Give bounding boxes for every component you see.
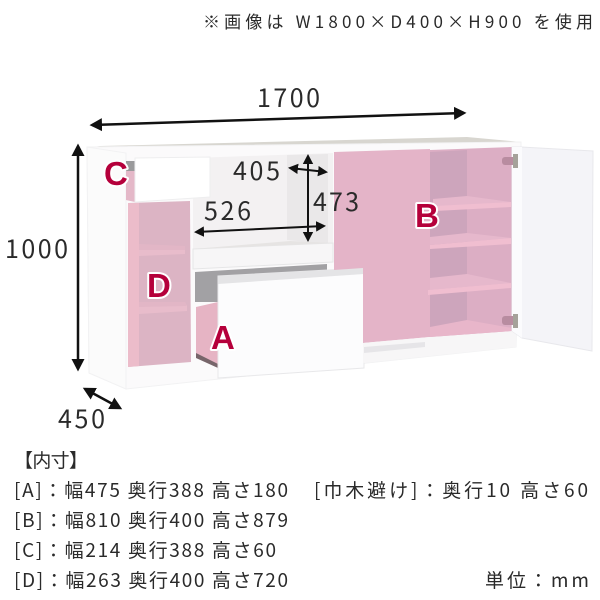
arrow: depth 450: [85, 389, 120, 408]
middle drawer strip: [193, 243, 333, 269]
row C: [C]：幅214 奥行388 高さ60: [14, 536, 276, 563]
arrow: height 1000: [77, 146, 79, 369]
door panel B: [334, 149, 430, 343]
row B: [B]：幅810 奥行400 高さ879: [14, 506, 288, 533]
note: image specification: ※画像は W1800×D400×H900 を使用: [203, 8, 593, 33]
letter A: A: [211, 319, 235, 356]
label: 1700: 1700: [257, 79, 320, 115]
center opening: [193, 153, 333, 250]
arrow: 405: [290, 168, 326, 172]
arrow: 526: [196, 226, 324, 232]
shelf compartment B: [428, 147, 512, 337]
label: 1000: 1000: [5, 230, 68, 266]
open door: [512, 147, 593, 351]
letter C: C: [104, 155, 128, 192]
label: 526: 526: [204, 192, 251, 228]
cabinet top surface: [88, 137, 521, 148]
letter D: D: [147, 267, 171, 304]
row A: [A]：幅475 奥行388 高さ180: [14, 476, 288, 503]
cabinet body: [87, 142, 521, 389]
dimensions table: [14, 446, 589, 593]
label: 473: 473: [313, 183, 359, 219]
plinth: [363, 331, 516, 363]
letter B: B: [415, 197, 439, 234]
drawer A interior: [195, 264, 327, 368]
drawer C: [126, 157, 210, 202]
table heading: 【内寸】: [14, 446, 88, 473]
compartment D: [128, 201, 191, 367]
arrow: width 1700: [92, 113, 464, 125]
drawer A front: [218, 268, 364, 378]
label: 450: 450: [58, 400, 105, 436]
hinges: [502, 154, 518, 328]
label: 405: 405: [233, 152, 280, 188]
cabinet illustration: [87, 137, 593, 389]
row D: [D]：幅263 奥行400 高さ720: [14, 566, 288, 593]
plinth clearance note: [巾木避け]：奥行10 高さ60: [314, 476, 588, 503]
unit note: 単位：mm: [485, 566, 589, 593]
arrow: 473: [307, 156, 309, 240]
shelves: [433, 196, 511, 207]
